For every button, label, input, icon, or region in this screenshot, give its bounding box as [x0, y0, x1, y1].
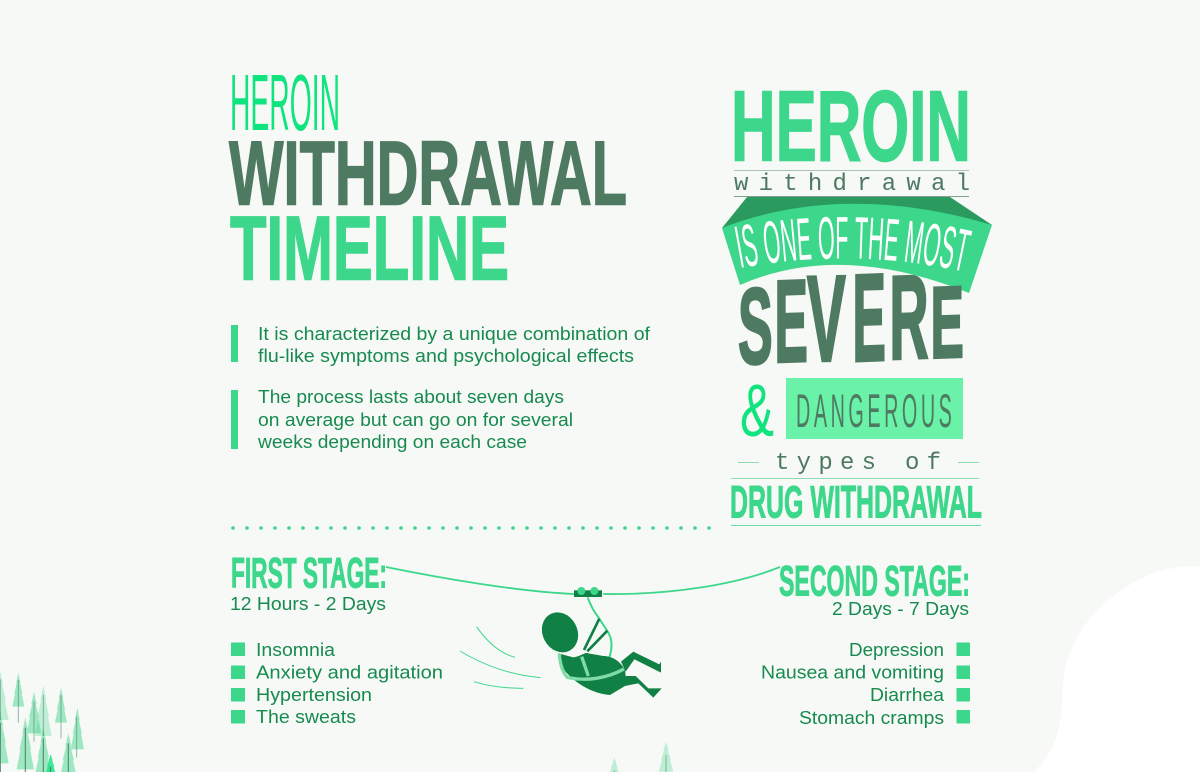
- second stage heading: 2 Days - 7 Days: [832, 598, 969, 619]
- first stage list: [231, 639, 443, 727]
- severe lettering: [738, 248, 964, 389]
- severe lettering: E: [774, 257, 808, 388]
- intro text block 1: [231, 323, 651, 366]
- harness: [559, 654, 624, 679]
- intro text block 2: The process lasts about seven days: [258, 386, 564, 407]
- dangerous box: DANGEROUS: [796, 384, 952, 437]
- severe lettering: S: [738, 265, 773, 387]
- first stage heading: 12 Hours - 2 Days: [230, 593, 386, 614]
- speed lines: [460, 627, 541, 688]
- intro text block 2: weeks depending on each case: [257, 431, 527, 452]
- zip line cable: [386, 567, 780, 594]
- zip line rider: [535, 587, 662, 698]
- trees: bottom centre: [609, 742, 673, 772]
- severe lettering: E: [930, 265, 964, 381]
- first stage list: Anxiety and agitation: [256, 662, 443, 682]
- typographic panel: [722, 70, 992, 528]
- first stage list: Hypertension: [256, 684, 372, 705]
- head: [535, 606, 585, 659]
- second stage list: Nausea and vomiting: [761, 662, 944, 682]
- intro text block 2: [231, 386, 573, 452]
- body and legs: [558, 653, 662, 698]
- white corner blob: [1033, 566, 1200, 772]
- dotted divider: [233, 526, 710, 530]
- second stage list: [761, 639, 970, 728]
- severe lettering: R: [890, 249, 928, 385]
- trees: left forest: [0, 670, 84, 772]
- second stage heading: SECOND STAGE:: [779, 558, 970, 606]
- first stage list: Insomnia: [256, 639, 336, 660]
- arms: [584, 619, 607, 651]
- second stage list: Diarrhea: [870, 684, 945, 705]
- intro text block 1: flu-like symptoms and psychological effects: [258, 345, 634, 366]
- intro text block 2: on average but can go on for several: [258, 409, 573, 430]
- title: withdrawal: WITHDRAWAL: [229, 124, 627, 224]
- heroin lettering: HEROIN: [731, 70, 971, 182]
- first stage list: The sweats: [256, 706, 356, 727]
- first stage heading: FIRST STAGE:: [231, 550, 387, 598]
- trolley: [574, 587, 602, 597]
- second stage heading: [779, 558, 970, 619]
- drug withdrawal: DRUG WITHDRAWAL: [730, 476, 982, 528]
- title: timeline: TIMELINE: [230, 198, 509, 300]
- intro text block 1: It is characterized by a unique combination of: [258, 323, 651, 344]
- ribbon banner: IS ONE OF THE MOST: [734, 216, 972, 270]
- title: [229, 58, 627, 300]
- rope: [588, 597, 612, 657]
- second stage list: Stomach cramps: [799, 707, 944, 728]
- title: HEROIN: [230, 58, 340, 147]
- severe lettering: V: [807, 252, 846, 388]
- first stage heading: [230, 550, 387, 614]
- second stage list: Depression: [849, 639, 944, 660]
- withdrawal lettering: withdrawal: [734, 171, 970, 198]
- types of: types of: [775, 450, 941, 477]
- severe lettering: E: [852, 248, 886, 389]
- ampersand: &: [740, 369, 774, 452]
